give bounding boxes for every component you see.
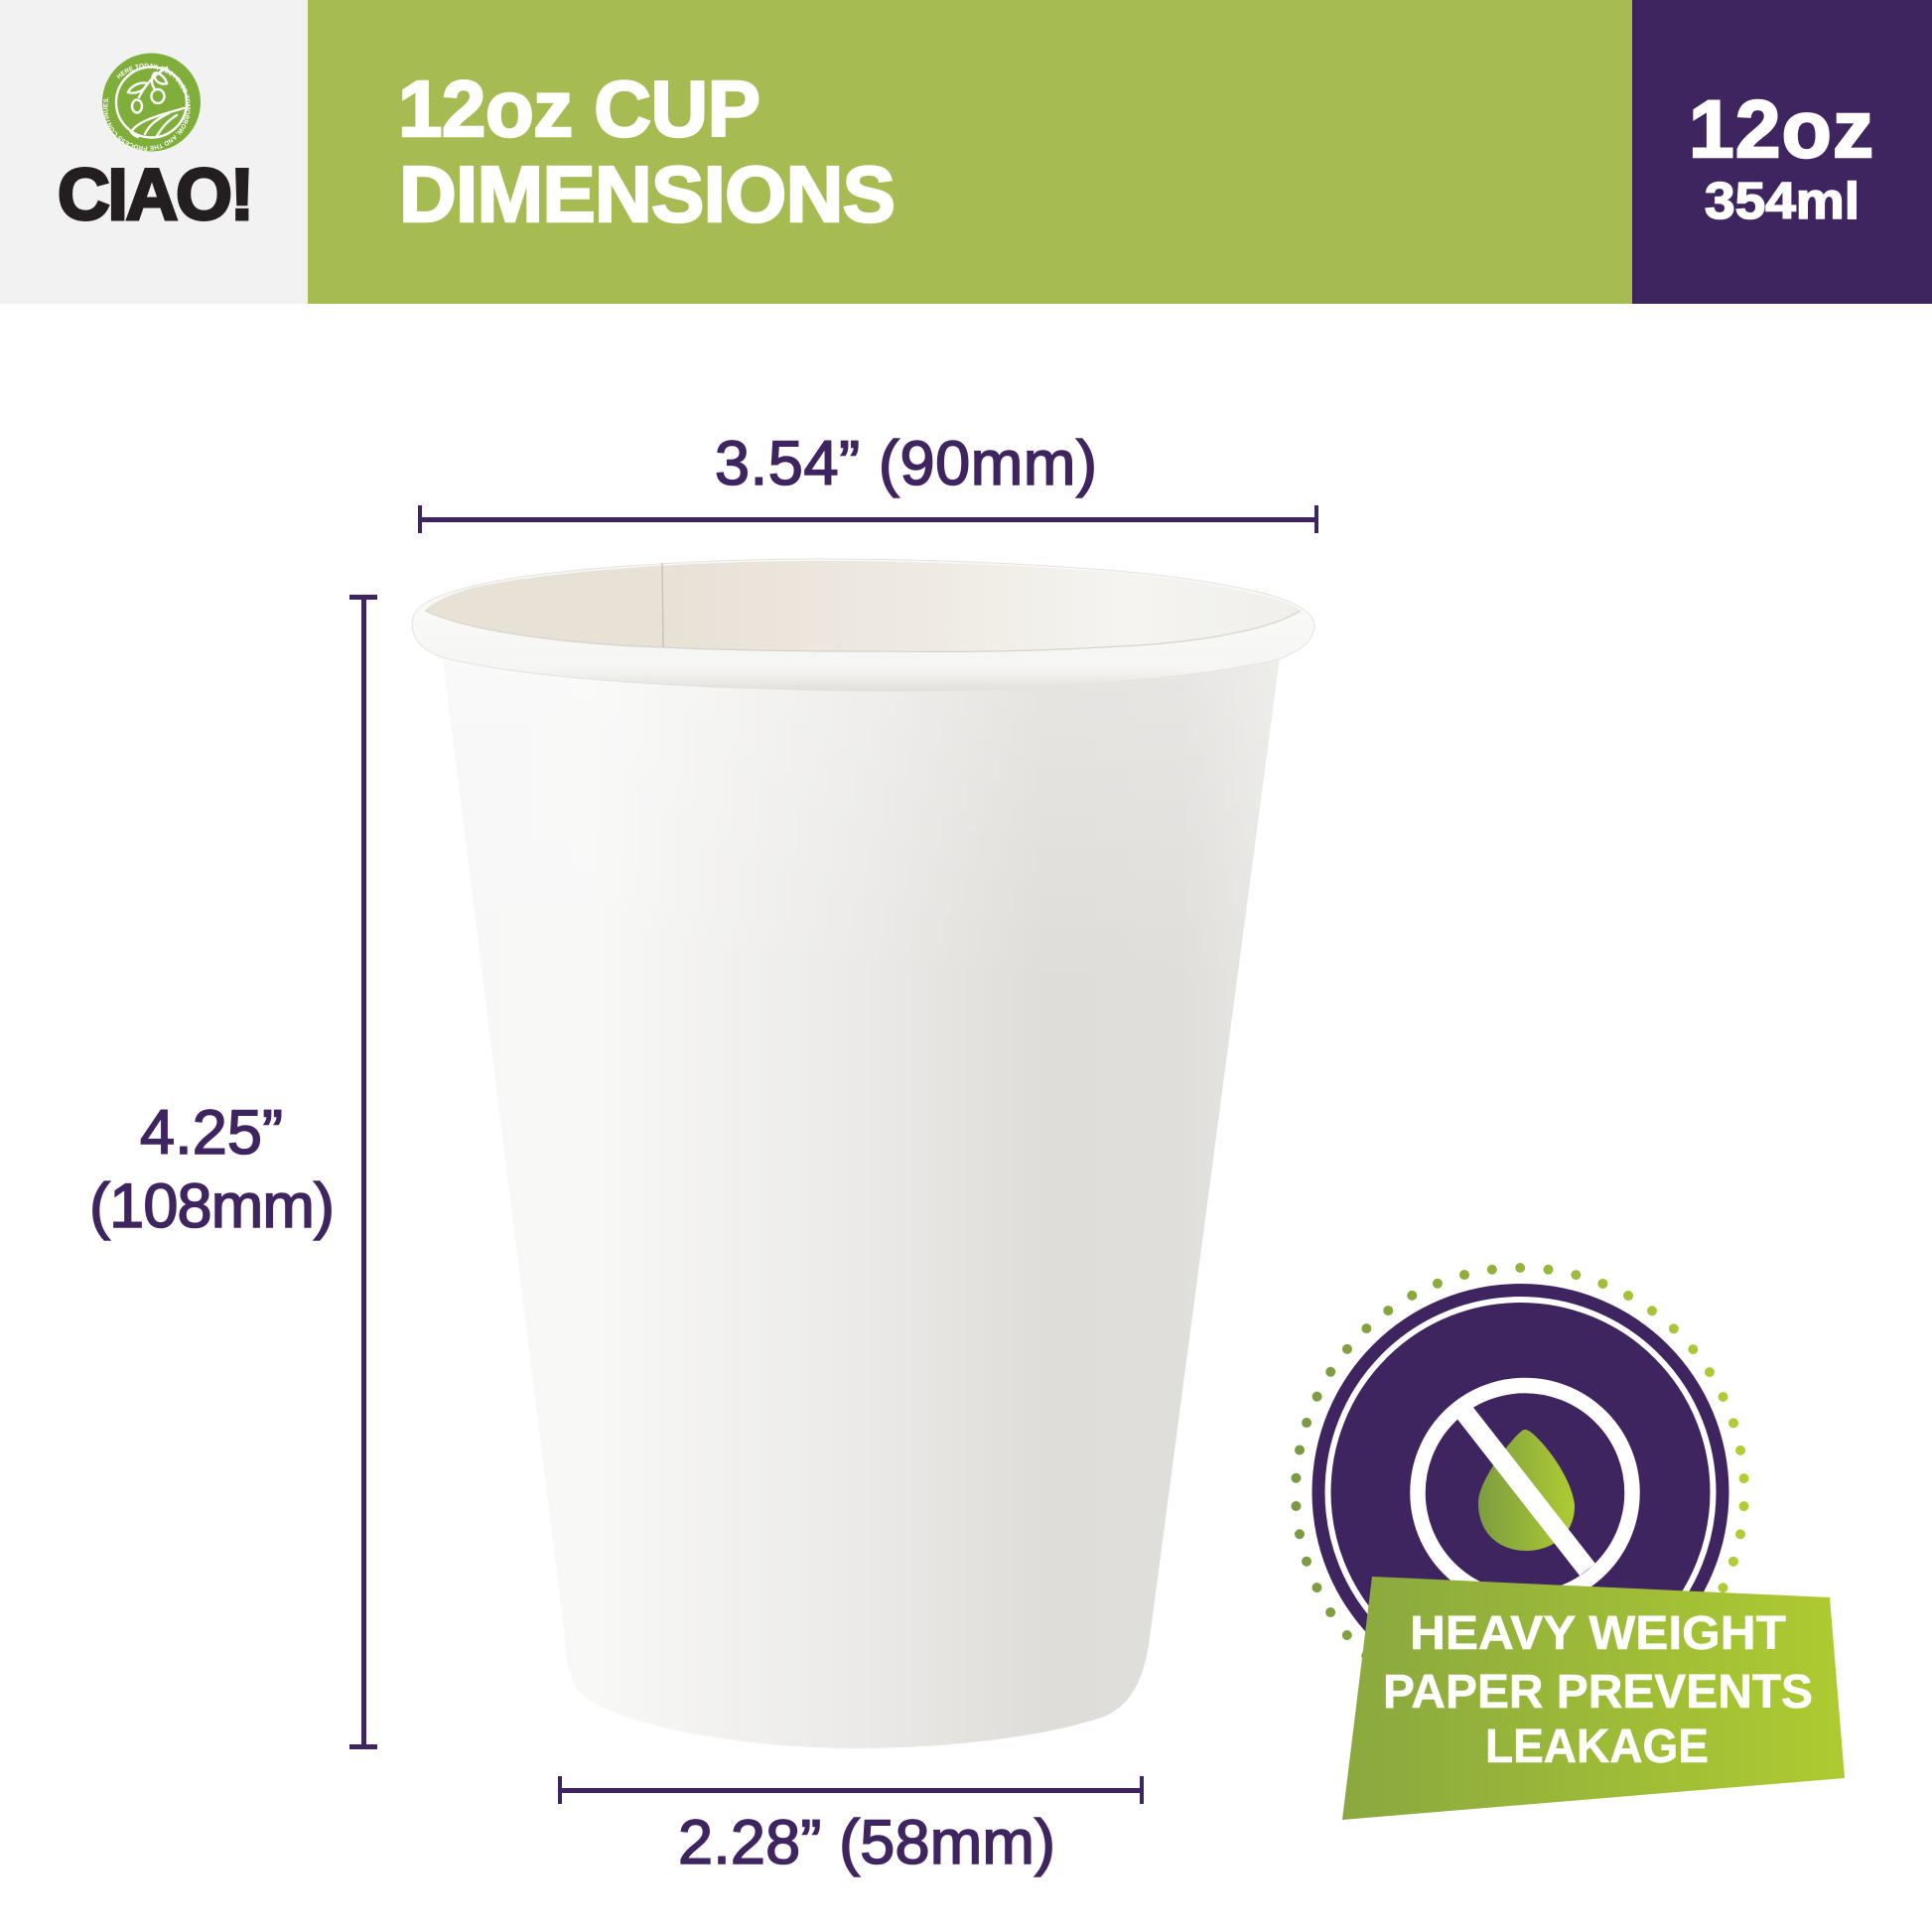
header: title band	[308, 0, 1632, 304]
icon: water drop	[1478, 1430, 1575, 1551]
logo wordmark: CIAO!	[58, 155, 254, 235]
label: height	[89, 1098, 335, 1241]
cup seam	[662, 563, 663, 647]
icon: recycled logo badge: HERE TODAY, RECYCLED TOMORROW, AND THE PROCESS CONTINUES.	[103, 64, 191, 151]
ribbon banner	[1342, 1577, 1845, 1820]
label: height: 4.25”	[140, 1098, 283, 1168]
capacity 12oz: 12oz	[1689, 84, 1873, 175]
header: logo panel	[0, 0, 308, 304]
cup rim	[412, 559, 1314, 691]
banner text: PAPER PREVENTS	[1383, 1666, 1813, 1719]
cup interior	[425, 561, 1301, 651]
purple disc	[1312, 1284, 1729, 1701]
title	[398, 65, 896, 238]
banner text: LEAKAGE	[1485, 1721, 1709, 1773]
title: DIMENSIONS	[399, 150, 896, 238]
cup body	[442, 650, 1281, 1748]
badge: heavy weight paper	[1296, 1268, 1845, 1820]
paper cup illustration	[412, 559, 1314, 1748]
label: top diameter: 3.54” (90mm)	[715, 429, 1097, 498]
title: 12oz CUP	[398, 65, 760, 153]
height dimension line	[349, 595, 377, 1749]
dotted ring	[1296, 1268, 1744, 1717]
capacity 354ml: 354ml	[1705, 173, 1860, 230]
header: capacity panel	[1632, 0, 1932, 304]
banner text	[1383, 1607, 1813, 1773]
label: height: (108mm)	[89, 1172, 335, 1241]
icon: prohibition sign	[1418, 1386, 1632, 1600]
banner text: HEAVY WEIGHT	[1410, 1607, 1786, 1660]
label: bottom diameter: 2.28” (58mm)	[678, 1808, 1055, 1877]
width dimension line: top	[418, 505, 1318, 533]
width dimension line: bottom	[558, 1776, 1144, 1804]
